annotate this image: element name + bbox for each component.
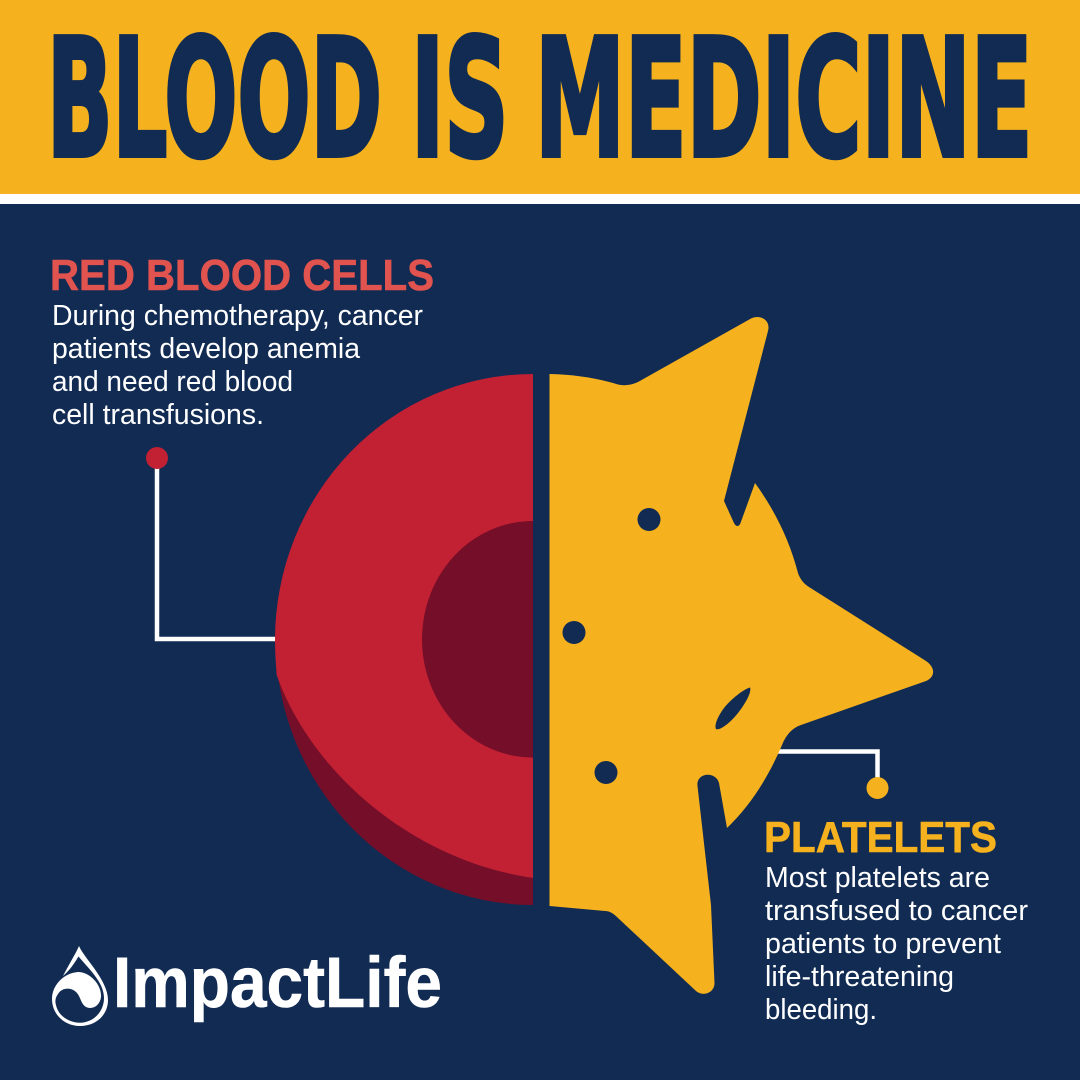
red blood cells description: and need red blood: [52, 366, 293, 398]
title: BLOOD: [47, 6, 382, 194]
platelet granule left: [562, 621, 586, 644]
red blood cells description: patients develop anemia: [52, 333, 361, 365]
red blood cells description: [52, 300, 423, 431]
wordmark: ImpactLife: [113, 944, 442, 1023]
illustration: platelet half: [550, 317, 933, 994]
icon: blood drop: [52, 946, 108, 1026]
illustration: red blood cell half: [275, 374, 533, 905]
red cell inner hollow: [422, 521, 533, 758]
platelets description: Most platelets are: [765, 862, 990, 894]
header band: [0, 0, 1080, 204]
title: IS: [411, 6, 508, 194]
red blood cells text block: [50, 251, 434, 431]
platelets description: bleeding.: [765, 994, 877, 1026]
red cell body: [275, 374, 533, 878]
red blood cells heading: RED BLOOD CELLS: [50, 251, 434, 300]
connector: red blood cell callout: [146, 447, 277, 639]
platelets text block: [764, 813, 1028, 1026]
platelet elongated granule: [715, 688, 750, 729]
red cell shadow edge: [276, 640, 533, 905]
red blood cells description: cell transfusions.: [52, 399, 264, 431]
platelets description: life-threatening: [765, 961, 954, 993]
platelets description: [765, 862, 1028, 1026]
platelets description: patients to prevent: [765, 928, 1001, 960]
platelets heading: PLATELETS: [764, 813, 997, 862]
platelet granule bottom: [594, 761, 618, 784]
connector: platelet callout: [775, 752, 888, 799]
platelets description: transfused to cancer: [765, 895, 1028, 927]
platelet body: [550, 317, 933, 994]
red blood cells description: During chemotherapy, cancer: [52, 300, 423, 332]
logo: ImpactLife: [52, 944, 442, 1026]
title: [47, 6, 1032, 194]
platelet granule top: [638, 508, 660, 531]
